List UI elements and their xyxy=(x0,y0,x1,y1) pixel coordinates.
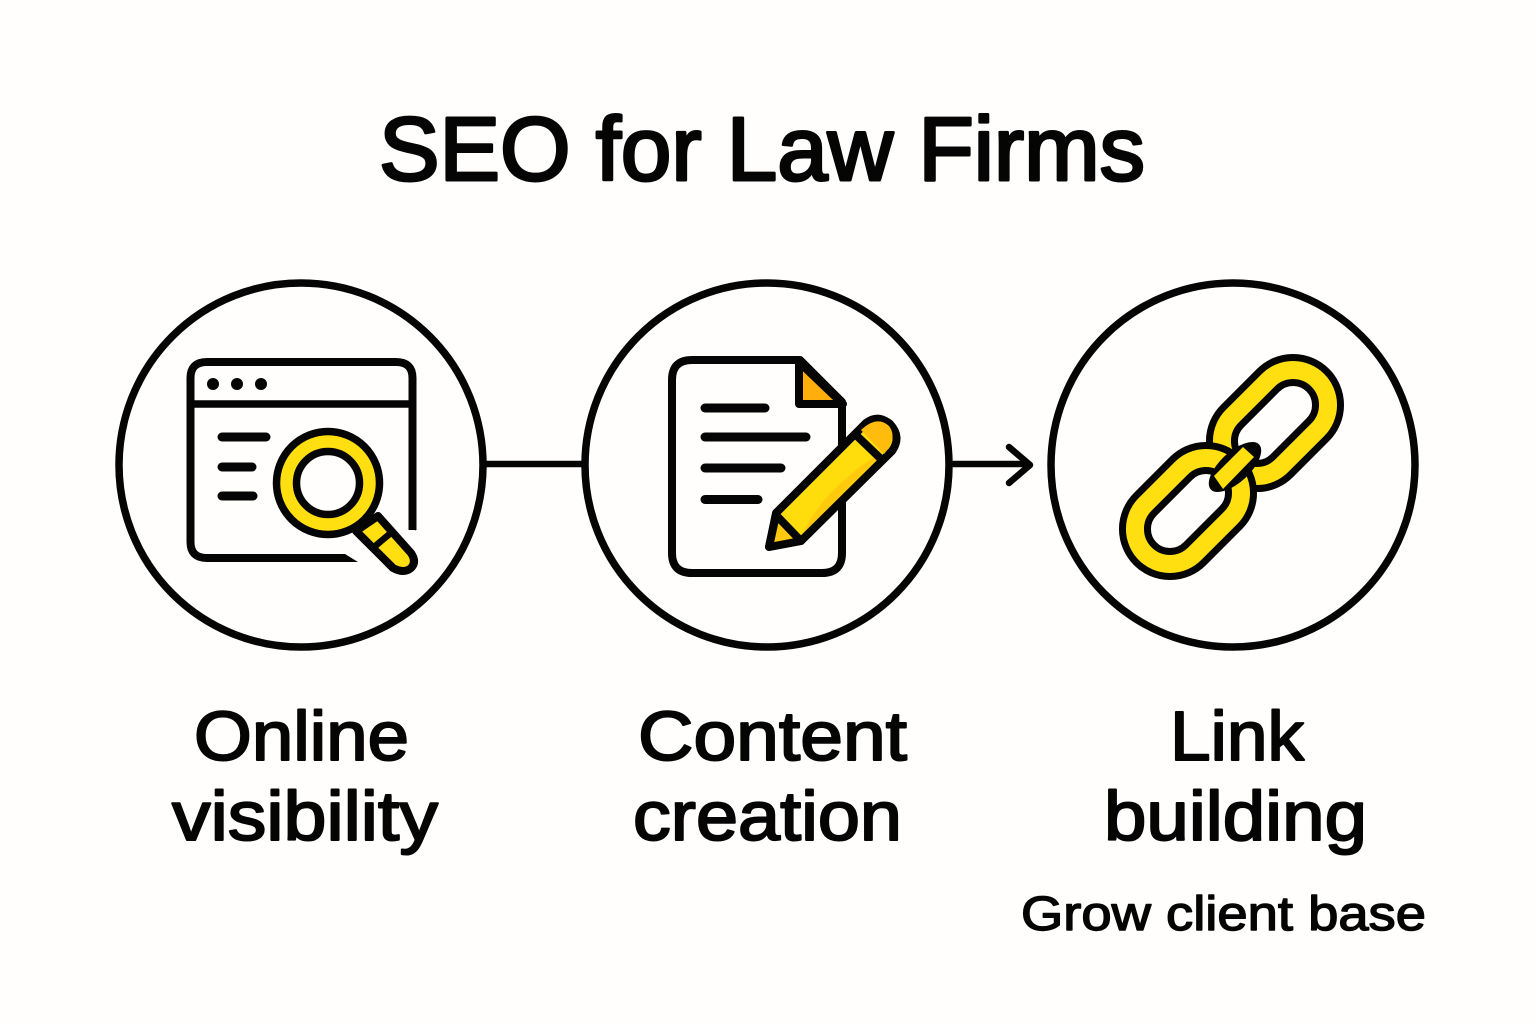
panel: content creation xyxy=(585,283,949,855)
icon: browser window with magnifying glass xyxy=(190,362,416,571)
label: online visibility: visibility xyxy=(172,777,438,855)
caption: grow client base: Grow client base xyxy=(1021,888,1426,941)
circle outline 2 xyxy=(585,283,949,647)
lower chain link xyxy=(1120,443,1256,579)
label: online visibility xyxy=(172,697,438,855)
circle outline 1 xyxy=(119,283,483,647)
icon: document with pencil xyxy=(672,360,897,573)
label: link building: Link xyxy=(1170,697,1305,775)
circle outline 3 xyxy=(1051,283,1415,647)
title: SEO for Law Firms xyxy=(379,100,1145,200)
label: link building xyxy=(1104,697,1367,855)
label: content creation: Content xyxy=(638,697,907,775)
arrow between step 2 and step 3 xyxy=(950,447,1030,483)
panel: online visibility xyxy=(119,283,483,855)
label: online visibility: Online xyxy=(194,697,409,775)
panel: link building xyxy=(1021,283,1426,941)
connector line between step 1 and step 2 xyxy=(484,461,585,467)
icon: chain links xyxy=(1120,355,1343,579)
icon: pencil xyxy=(769,419,897,547)
label: content creation xyxy=(633,697,907,855)
upper chain link xyxy=(1207,355,1343,491)
label: link building: building xyxy=(1104,777,1367,855)
chain connector xyxy=(1201,434,1269,500)
label: content creation: creation xyxy=(633,777,902,855)
